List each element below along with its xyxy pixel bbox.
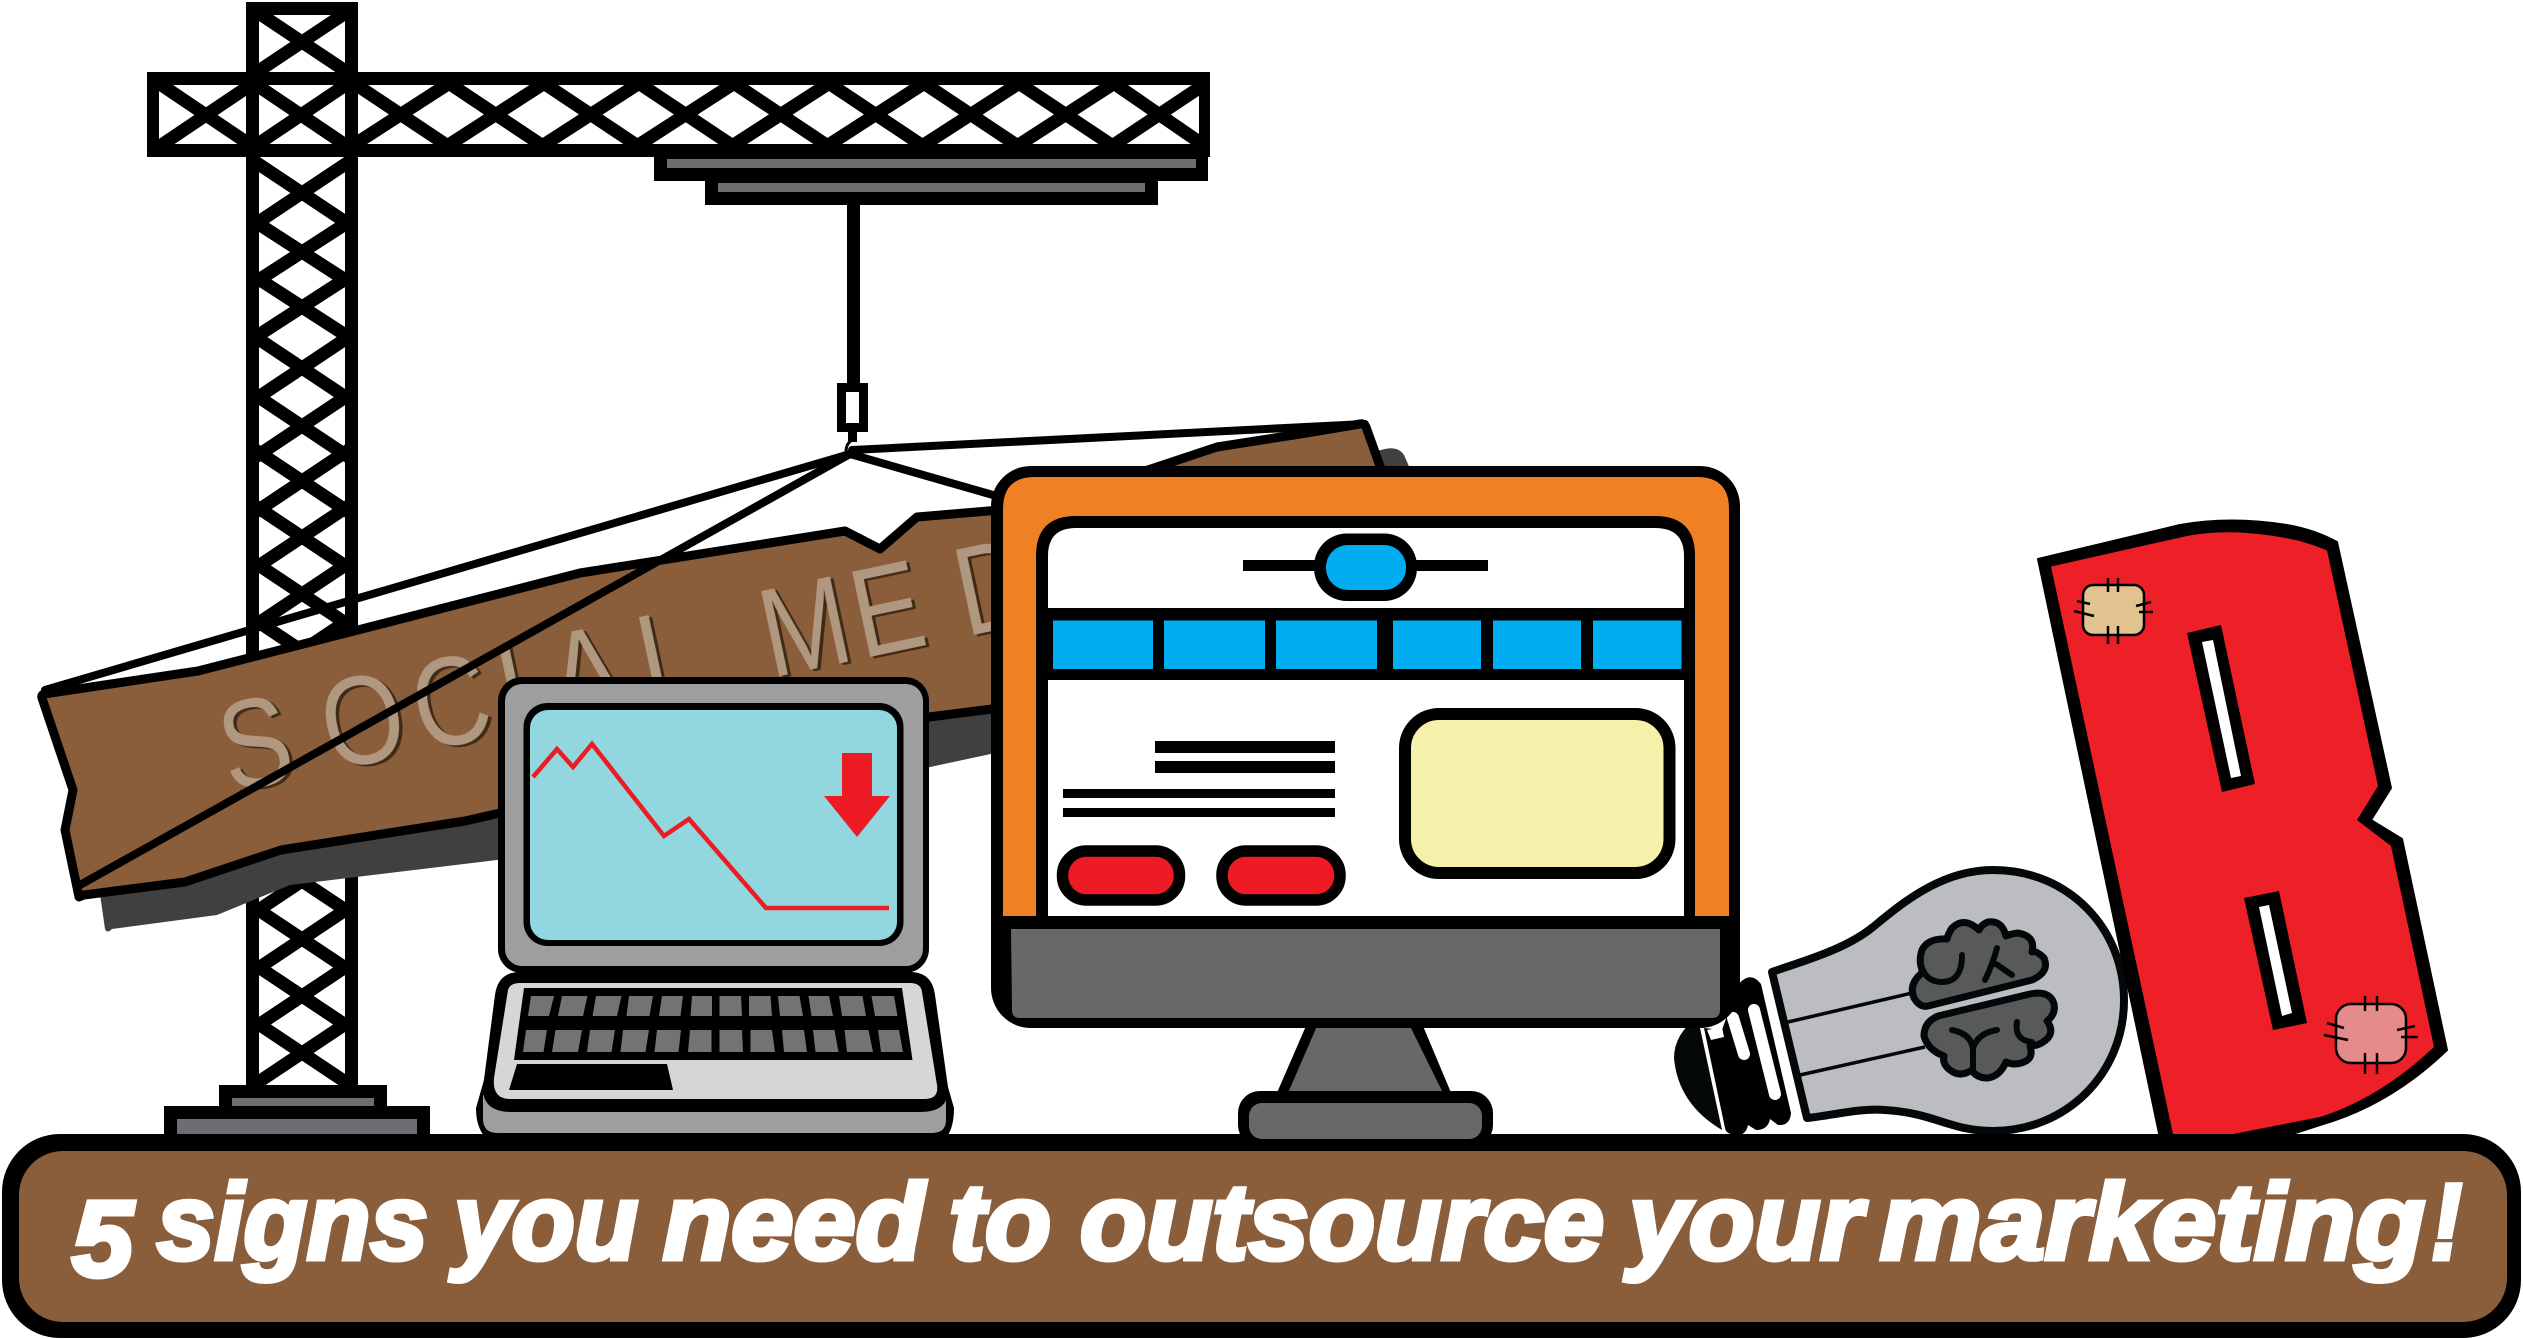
website button two bbox=[1222, 851, 1340, 900]
monitor chin bbox=[1011, 929, 1720, 1018]
laptop with falling chart bbox=[476, 677, 954, 1138]
letter outline bbox=[2038, 520, 2447, 1138]
banner title: to bbox=[949, 1161, 1051, 1282]
website image panel bbox=[1405, 714, 1670, 873]
monitor foot bbox=[1238, 1091, 1493, 1147]
title banner bbox=[2, 1134, 2521, 1338]
laptop screen bbox=[524, 703, 904, 946]
bulb screw base bbox=[1674, 977, 1791, 1135]
banner title: you bbox=[449, 1161, 638, 1282]
bulb glass bbox=[1772, 870, 2124, 1131]
cable and hook block bbox=[837, 205, 868, 452]
banner title: need bbox=[663, 1161, 926, 1282]
banner title bbox=[72, 1161, 2462, 1299]
letter fill bbox=[2051, 532, 2434, 1134]
banner title: signs bbox=[157, 1161, 428, 1282]
banner title: ! bbox=[2431, 1161, 2462, 1282]
monitor stand bbox=[1276, 1026, 1452, 1095]
trolley plates bbox=[654, 157, 1208, 205]
tower crane bbox=[147, 2, 1210, 1136]
crane jib bbox=[147, 72, 1210, 157]
website text lines bbox=[1063, 741, 1335, 817]
banner title: your bbox=[1624, 1161, 1867, 1282]
banner title: outsource bbox=[1080, 1161, 1604, 1282]
website button one bbox=[1062, 851, 1180, 900]
upper counter bbox=[2187, 625, 2255, 792]
trackpad bbox=[509, 1064, 673, 1090]
broken red letter B bbox=[2038, 520, 2447, 1138]
desktop monitor with website bbox=[991, 466, 1740, 1147]
keyboard bbox=[514, 988, 912, 1060]
filaments bbox=[1788, 993, 1925, 1075]
crane base bbox=[164, 1085, 430, 1136]
sign board bbox=[42, 424, 1385, 897]
monitor body bbox=[991, 466, 1740, 1028]
broken social media sign bbox=[42, 424, 1415, 932]
laptop tray bbox=[476, 1080, 954, 1138]
sign shadow bbox=[98, 448, 1415, 932]
website logo bar bbox=[1243, 534, 1488, 601]
website nav bar bbox=[1048, 608, 1684, 680]
laptop screen bezel bbox=[498, 677, 929, 973]
laptop keyboard deck bbox=[483, 972, 948, 1112]
banner title: 5 bbox=[72, 1178, 135, 1299]
crane mast bbox=[246, 2, 358, 1092]
falling line chart bbox=[533, 744, 889, 908]
website window bbox=[1036, 516, 1695, 916]
lower counter bbox=[2244, 891, 2307, 1030]
sign carved text: SOCIAL MEDIA bbox=[206, 480, 1185, 820]
light bulb with brain bbox=[1674, 870, 2124, 1135]
banner background bbox=[2, 1134, 2521, 1338]
patch: pink bbox=[2324, 996, 2418, 1074]
rigging cables bbox=[45, 424, 1365, 885]
brain lower lobe bbox=[1924, 993, 2054, 1078]
brain upper lobe bbox=[1912, 922, 2046, 1006]
banner title: marketing bbox=[1880, 1161, 2425, 1282]
patch: tan bbox=[2074, 578, 2153, 644]
red down arrow bbox=[824, 753, 890, 837]
